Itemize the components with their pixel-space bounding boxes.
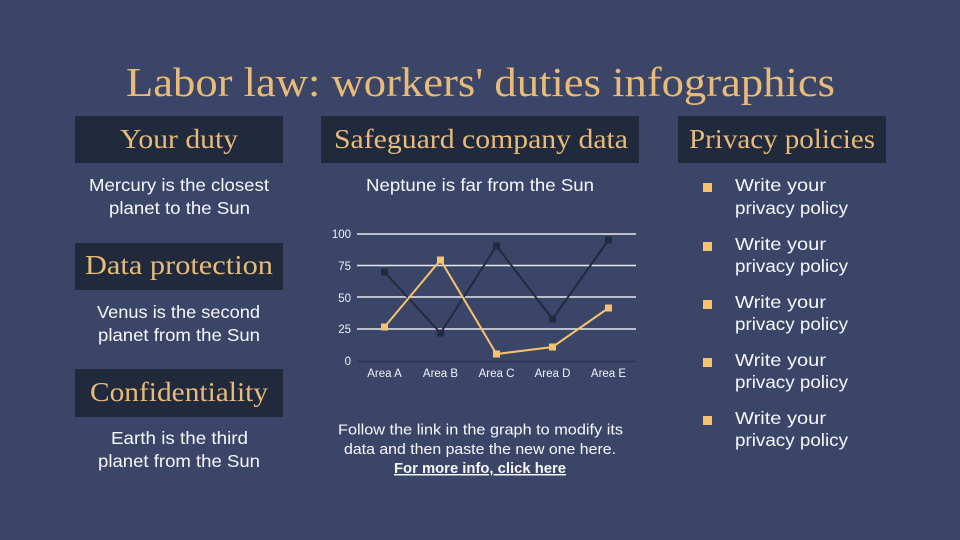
panel: your duty xyxy=(75,116,283,218)
y axis labels xyxy=(332,229,351,368)
panel: confidentiality xyxy=(75,369,283,471)
heading: privacy policies xyxy=(678,116,886,163)
text: chart note: data and then paste the new one here. xyxy=(344,442,616,458)
y axis labels: 100 xyxy=(332,229,351,241)
text: venus: planet from the Sun xyxy=(98,325,260,345)
y axis labels: 75 xyxy=(338,261,351,273)
heading: safeguard company data: Safeguard company data xyxy=(334,124,628,154)
x axis labels: Area B xyxy=(423,368,458,380)
bullet item 3 xyxy=(703,292,848,334)
bullet item 4: privacy policy xyxy=(735,372,848,392)
text: chart note xyxy=(338,422,623,477)
x axis labels: Area A xyxy=(367,368,402,380)
bullet item 5: Write your xyxy=(735,408,826,428)
text: chart note: For more info, click here xyxy=(394,461,566,477)
text: venus xyxy=(97,302,260,345)
heading: data protection: Data protection xyxy=(85,250,274,280)
text: earth: planet from the Sun xyxy=(98,451,260,471)
x axis labels: Area C xyxy=(479,368,514,380)
x axis labels: Area E xyxy=(591,368,626,380)
text: chart note: Follow the link in the graph to modify its xyxy=(338,422,623,438)
text: mercury: planet to the Sun xyxy=(109,198,250,218)
heading: your duty: Your duty xyxy=(120,124,239,154)
text: neptune: Neptune is far from the Sun xyxy=(366,175,594,195)
bullet item 1: Write your xyxy=(735,175,826,195)
line chart xyxy=(332,229,636,380)
bullet item 2 xyxy=(703,234,848,276)
heading: safeguard company data xyxy=(321,116,639,163)
heading: confidentiality: Confidentiality xyxy=(90,377,269,407)
text: earth xyxy=(98,428,260,471)
heading: confidentiality xyxy=(75,369,283,417)
x axis labels xyxy=(367,368,626,380)
title: Labor law: workers' duties infographics xyxy=(126,59,835,105)
gold data series xyxy=(381,256,612,358)
bullet item 3: privacy policy xyxy=(735,314,848,334)
bullet item 5: privacy policy xyxy=(735,430,848,450)
bullet item 5 xyxy=(703,408,848,450)
heading: data protection xyxy=(75,243,283,290)
bullet item 1 xyxy=(703,175,848,218)
bullet item 4: Write your xyxy=(735,350,826,370)
y axis labels: 25 xyxy=(338,324,351,336)
heading: privacy policies: Privacy policies xyxy=(689,124,875,154)
panel: privacy policies xyxy=(678,116,886,450)
panel: safeguard company data xyxy=(321,116,639,477)
y axis labels: 0 xyxy=(345,356,351,368)
heading: your duty xyxy=(75,116,283,163)
bullet item 1: privacy policy xyxy=(735,198,848,218)
bullet item 2: privacy policy xyxy=(735,256,848,276)
bullet list xyxy=(703,175,848,450)
bullet item 2: Write your xyxy=(735,234,826,254)
dark data series xyxy=(381,236,612,336)
text: mercury: Mercury is the closest xyxy=(89,175,269,195)
bullet item 3: Write your xyxy=(735,292,826,312)
panel: data protection xyxy=(75,243,283,345)
text: mercury xyxy=(89,175,269,218)
text: earth: Earth is the third xyxy=(111,428,248,448)
x axis labels: Area D xyxy=(535,368,570,380)
y axis labels: 50 xyxy=(338,293,351,305)
text: venus: Venus is the second xyxy=(97,302,260,322)
bullet item 4 xyxy=(703,350,848,392)
